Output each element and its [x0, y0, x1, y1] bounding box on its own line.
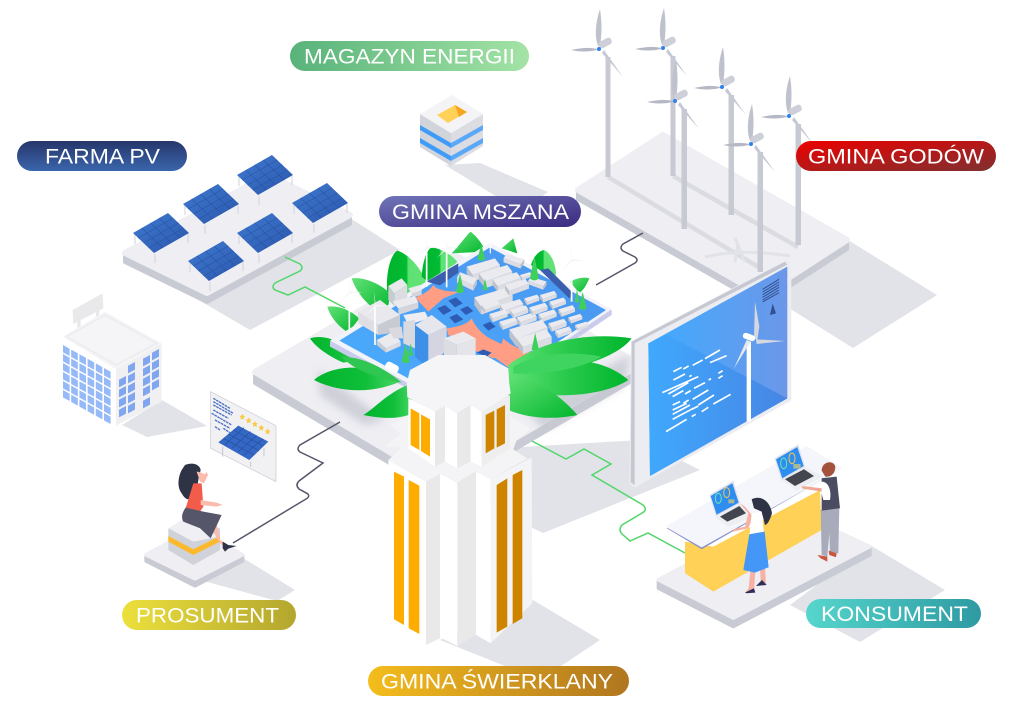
- upper section: [408, 395, 510, 468]
- label: PROSUMENT: PROSUMENT: [136, 604, 279, 628]
- water areas: [427, 263, 573, 298]
- salmon districts: [415, 285, 534, 367]
- monitor with wind turbine: [630, 262, 791, 487]
- solar panels: [133, 155, 348, 291]
- label: GMINA MSZANA: [379, 196, 581, 227]
- label: GMINA ŚWIERKLANY: GMINA ŚWIERKLANY: [381, 670, 613, 694]
- label: GMINA GODÓW: [796, 141, 996, 171]
- turbine 2: [635, 8, 687, 176]
- left city cluster: [358, 278, 428, 353]
- label: KONSUMENT: KONSUMENT: [821, 603, 968, 626]
- consumer desk area: [658, 444, 870, 627]
- monitor small text block: [763, 279, 779, 302]
- label: GMINA MSZANA: GMINA MSZANA: [392, 201, 569, 224]
- wind turbines: [571, 8, 813, 272]
- front leaves: [314, 336, 632, 418]
- label: GMINA ŚWIERKLANY: [368, 666, 629, 696]
- platform: [658, 510, 870, 627]
- central platform: [255, 255, 640, 493]
- solar farm platform: [125, 175, 350, 302]
- seated woman: [178, 464, 237, 552]
- desk: [685, 490, 822, 592]
- lower right wall: [491, 457, 532, 643]
- tablet body: [330, 243, 612, 417]
- turbine 3: [647, 61, 699, 229]
- leaf shadows on platform: [318, 355, 630, 430]
- panel image: [218, 426, 268, 467]
- laptop 2: [774, 444, 823, 491]
- monitor code lines: [662, 350, 731, 432]
- lower windows: [394, 470, 522, 634]
- front block: [444, 332, 476, 357]
- upper windows: [411, 405, 505, 457]
- connector: solar farm to city: [273, 257, 345, 308]
- turbine 6: [761, 76, 813, 245]
- prosumer screen: [211, 392, 276, 482]
- trees: [402, 244, 587, 363]
- building windows right wall: [119, 349, 159, 417]
- floor shadows: [122, 163, 945, 680]
- stars: [239, 414, 271, 434]
- city tablet with leaves: [310, 215, 632, 418]
- label: PROSUMENT: [122, 600, 296, 630]
- label: KONSUMENT: [806, 599, 981, 628]
- tower roof: [407, 355, 511, 413]
- turbine 5: [723, 104, 775, 272]
- building windows left wall: [63, 345, 111, 424]
- office building: [63, 293, 162, 426]
- turbine 1: [571, 9, 623, 177]
- label: FARMA PV: [17, 141, 187, 171]
- turbine 4: [694, 47, 746, 215]
- energy storage icon: [420, 95, 483, 166]
- tablet screen: [339, 247, 606, 407]
- monitor turbine: [734, 302, 785, 422]
- back leaves: [310, 232, 589, 363]
- glass tower: [415, 315, 447, 368]
- label: MAGAZYN ENERGII: MAGAZYN ENERGII: [304, 46, 515, 68]
- roof sign: [73, 293, 103, 335]
- screen text: [212, 398, 233, 433]
- lower centre strips: [426, 472, 491, 646]
- tablet home button: [384, 361, 400, 374]
- laptop 1: [709, 481, 753, 527]
- lower left wall: [388, 460, 426, 645]
- label: GMINA GODÓW: GMINA GODÓW: [808, 146, 984, 168]
- city tower: [385, 355, 532, 646]
- middle ledge: [385, 415, 531, 483]
- mini turbines: [339, 215, 585, 345]
- label: FARMA PV: FARMA PV: [45, 146, 160, 168]
- standing man: [802, 462, 840, 562]
- pv squares on map: [437, 297, 496, 357]
- long city blocks: [457, 254, 588, 354]
- connector: wind farm to city: [596, 233, 643, 285]
- prosumer platform and seat: [146, 464, 243, 586]
- connector: tower to consumer: [532, 441, 685, 553]
- connector: prosumer to city: [233, 422, 340, 543]
- standing woman: [733, 498, 772, 593]
- label: MAGAZYN ENERGII: [290, 41, 529, 71]
- wind farm platform: [578, 135, 847, 304]
